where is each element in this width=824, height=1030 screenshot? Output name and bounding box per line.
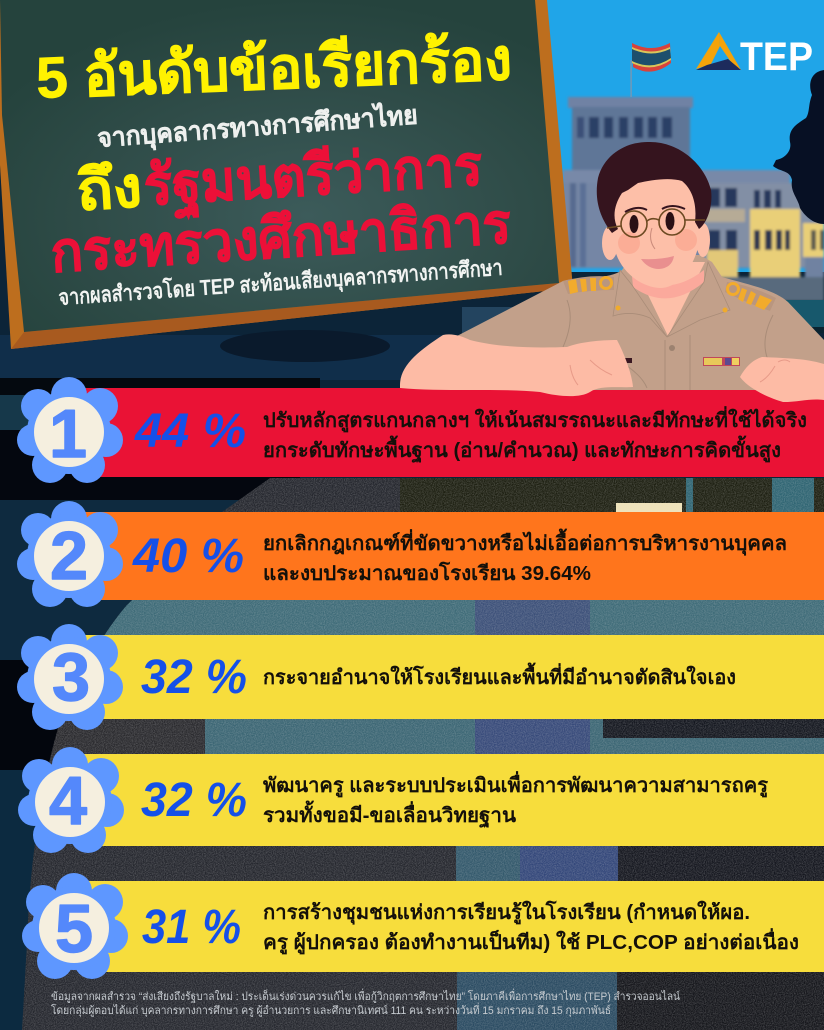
board surface <box>0 0 559 332</box>
bar 2 <box>80 512 824 600</box>
text 5: การสร้างชุมชนแห่งการเรียนรู้ในโรงเรียน (กำหนดให้ผอ. <box>263 900 750 926</box>
percent 3: 32 % <box>141 651 247 704</box>
hair <box>597 142 711 233</box>
percent 1: 44 % <box>134 405 246 458</box>
percent 5: 31 % <box>142 901 241 954</box>
shirt <box>455 255 824 390</box>
flower badge 3: 3 <box>52 639 90 715</box>
eyes and glasses <box>607 206 705 249</box>
mouth <box>641 256 674 269</box>
bar 1 <box>80 388 824 477</box>
ears <box>602 226 618 260</box>
tree <box>773 70 824 224</box>
textured arc area <box>0 478 824 1030</box>
text 4: รวมทั้งขอมี-ขอเลื่อนวิทยฐาน <box>263 800 516 829</box>
percent 2: 40 % <box>132 530 244 583</box>
flower badge 5 <box>22 873 128 979</box>
item 3 <box>17 624 824 730</box>
bar 4 <box>80 754 824 846</box>
text 2: และงบประมาณของโรงเรียน 39.64% <box>263 561 591 585</box>
building <box>563 97 824 301</box>
percent 4: 32 % <box>141 774 247 827</box>
bar 5 <box>85 881 824 972</box>
collar <box>613 262 730 337</box>
left epaulette <box>563 276 614 294</box>
title line 4: กระทรวงศึกษาธิการ <box>49 191 513 284</box>
face <box>613 174 700 288</box>
text 2: ยกเลิกกฎเกณฑ์ที่ขัดขวางหรือไม่เอื้อต่อการบริหารงานบุคคล <box>263 528 787 556</box>
item 2 <box>17 501 824 607</box>
text 1: ปรับหลักสูตรแกนกลางฯ ให้เน้นสมรรถนะและมีทักษะที่ใช้ได้จริง <box>263 405 807 434</box>
shirt seams <box>563 300 773 390</box>
flower badge 3 <box>17 624 123 730</box>
flower badge 2 <box>17 501 123 607</box>
lower scene bands <box>0 335 470 380</box>
icon: flag <box>630 43 671 97</box>
left arm and hand <box>400 334 633 396</box>
text 4 <box>263 770 768 829</box>
logo: TEP <box>696 32 813 79</box>
footer source note: โดยกลุ่มผู้ตอบได้แก่ บุคลากรทางการศึกษา ครู ผู้อำนวยการ และศึกษานิเทศน์ 111 คน ระหว่างวันที่ 15 มกราคม ถึง 15 กุมภาพันธ์ <box>51 1002 611 1017</box>
illustration: official character <box>400 142 824 402</box>
item 4 <box>18 747 824 853</box>
neck <box>632 262 705 336</box>
footer source note: ข้อมูลจากผลสำรวจ “ส่งเสียงถึงรัฐบาลใหม่ : ประเด็นเร่งด่วนควรแก้ไข เพื่อกู้วิกฤตการศึกษาไทย” โดยภาคีเพื่อการศึกษาไทย (TEP) สำรวจออนไลน์ <box>51 988 680 1003</box>
flower badge 2: 2 <box>50 518 88 594</box>
title line 3: ถึง <box>75 155 144 222</box>
finger lines <box>570 360 790 385</box>
chalkboard <box>0 0 573 349</box>
flower badge 5: 5 <box>55 891 93 967</box>
item 1 <box>17 377 824 483</box>
board frame <box>0 0 573 349</box>
flower badge 1 <box>17 377 123 483</box>
title line 5: จากผลสำรวจโดย TEP สะท้อนเสียงบุคลากรทางการศึกษา <box>58 254 503 312</box>
title line 1: 5 อันดับข้อเรียกร้อง <box>35 27 513 111</box>
title line 3: รัฐมนตรีว่าการ <box>142 133 484 222</box>
sky <box>545 0 824 272</box>
logo: TEP: TEP <box>740 35 813 79</box>
subtitle line 2: จากบุคลากรทางการศึกษาไทย <box>96 99 419 155</box>
text 3: กระจายอำนาจให้โรงเรียนและพื้นที่มีอำนาจตัดสินใจเอง <box>263 662 736 689</box>
text 4: พัฒนาครู และระบบประเมินเพื่อการพัฒนาความสามารถครู <box>263 770 768 799</box>
text 2 <box>263 528 787 585</box>
footer source note <box>51 988 680 1017</box>
item 5 <box>22 873 824 979</box>
flower badge 4 <box>18 747 124 853</box>
buttons and badges <box>616 306 740 366</box>
text 1 <box>263 405 807 464</box>
cheeks <box>618 229 697 254</box>
right hand <box>740 357 824 402</box>
right epaulette <box>725 282 776 311</box>
text 5: ครู ผู้ปกครอง ต้องทำงานเป็นทีม) ใช้ PLC,COP อย่างต่อเนื่อง <box>263 927 799 956</box>
flower badge 1: 1 <box>49 396 87 472</box>
flower badge 4: 4 <box>49 763 87 839</box>
text 5 <box>263 900 799 956</box>
bar 3 <box>80 635 824 719</box>
text 1: ยกระดับทักษะพื้นฐาน (อ่าน/คำนวณ) และทักษะการคิดขั้นสูง <box>263 435 781 464</box>
